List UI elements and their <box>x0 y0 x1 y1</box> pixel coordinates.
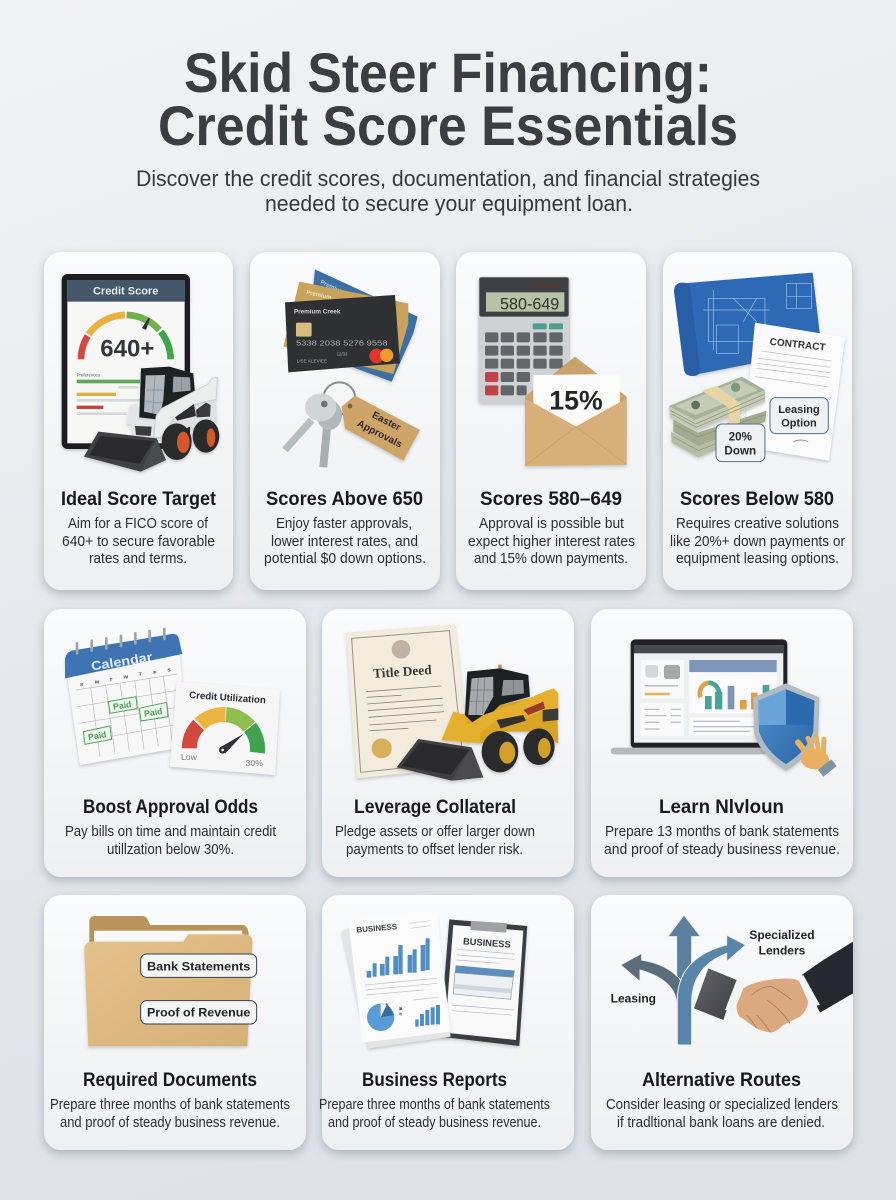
heading: Alternative Routes <box>642 1070 801 1091</box>
icon: title deed and yellow skid steer <box>346 624 558 781</box>
panel: scores above 650 <box>250 252 440 590</box>
panel: ideal score target <box>44 252 233 590</box>
body text: and proof of steady business revenue. <box>604 841 840 858</box>
body text: and proof of steady business revenue. <box>328 1114 541 1131</box>
icon: blueprint, contract and cash: 20% <box>729 430 753 443</box>
body text <box>468 515 635 567</box>
icon: credit score tablet and skid steer: Credit Score <box>93 286 158 298</box>
icon: folder with tabs: Proof of Revenue <box>147 1006 251 1019</box>
body text <box>50 1096 290 1131</box>
panel: boost approval odds <box>44 609 306 877</box>
heading: Scores Above 650 <box>266 489 423 510</box>
icon: credit cards and keys <box>283 269 420 467</box>
body text <box>670 515 845 567</box>
heading: Scores Below 580 <box>680 489 834 510</box>
heading: Boost Approval Odds <box>83 797 258 818</box>
heading: Scores 580–649 <box>480 489 622 510</box>
subtitle: Discover the credit scores, documentation, and financial strategies <box>136 166 760 191</box>
icon: laptop and shield <box>611 639 834 773</box>
body text: if tradltional bank loans are denied. <box>617 1114 825 1131</box>
body text <box>264 515 426 567</box>
body text: utillzation below 30%. <box>107 841 234 858</box>
body text <box>606 1096 838 1131</box>
icon: credit cards and keys: Premium <box>319 280 345 296</box>
body text: Prepare three months of bank statements <box>319 1096 550 1113</box>
icon: calendar and utilization gauge: Low <box>181 752 198 762</box>
icon: calendar and utilization gauge <box>65 629 280 775</box>
icon: report and clipboard <box>342 911 527 1048</box>
body text <box>319 1096 550 1131</box>
icon: calendar and utilization gauge: S <box>80 682 84 688</box>
subtitle <box>136 166 760 216</box>
icon: calendar and utilization gauge: Credit Utilization <box>189 690 266 706</box>
title: Credit Score Essentials <box>158 94 738 157</box>
body text: Consider leasing or specialized lenders <box>606 1096 838 1113</box>
icon: credit score tablet and skid steer <box>62 274 219 472</box>
icon: forked arrows and handshake: Specialized <box>749 928 815 942</box>
panel: scores below 580 <box>663 252 852 590</box>
heading: Learn Nlvloun <box>659 797 784 818</box>
body text: Approval is possible but <box>479 515 625 532</box>
body text: Pledge assets or offer larger down <box>335 823 535 840</box>
body text: 640+ to secure favorable <box>62 533 215 550</box>
icon: calendar and utilization gauge: Paid <box>87 729 107 742</box>
icon: credit cards and keys: Approvals <box>355 418 404 451</box>
panel: learn nivloun <box>591 609 853 877</box>
body text: like 20%+ down payments or <box>670 533 845 550</box>
heading: Business Reports <box>362 1070 507 1091</box>
icon: calendar and utilization gauge: Paid <box>143 706 163 719</box>
body text: rates and terms. <box>89 550 187 567</box>
icon: credit score tablet and skid steer: Preferences <box>77 373 100 378</box>
icon: blueprint, contract and cash: Leasing <box>778 404 820 416</box>
body text: Pay bills on time and maintain credit <box>65 823 277 840</box>
icon: calendar and utilization gauge: 30% <box>246 758 263 768</box>
panel: business reports <box>319 895 574 1150</box>
body text: payments to offset lender risk. <box>346 841 523 858</box>
panel: leverage collateral <box>322 609 574 877</box>
body text: Enjoy faster approvals, <box>276 515 412 532</box>
body text <box>335 823 535 858</box>
icon: report and clipboard: BUSINESS <box>356 922 398 935</box>
icon: calendar and utilization gauge: M <box>95 679 99 685</box>
heading: Required Documents <box>83 1070 257 1091</box>
icon: forked arrows and handshake: Lenders <box>759 944 806 958</box>
icon: calendar and utilization gauge: W <box>123 674 128 680</box>
icon: folder with tabs <box>84 916 257 1046</box>
icon: credit cards and keys: 12/33 <box>337 351 348 356</box>
icon: credit cards and keys: Easter <box>370 410 402 434</box>
body text: and proof of steady business revenue. <box>60 1114 280 1131</box>
body text: Prepare 13 months of bank statements <box>605 823 839 840</box>
panel: alternative routes <box>591 895 853 1150</box>
icon: calendar and utilization gauge: T <box>109 677 112 683</box>
icon: report and clipboard: BUSINESS <box>463 936 511 950</box>
body text: equipment leasing options. <box>676 550 839 567</box>
panel: scores 580-649 <box>456 252 646 590</box>
body text: expect higher interest rates <box>468 533 635 550</box>
title: Skid Steer Financing: <box>184 41 712 104</box>
body text <box>65 823 277 858</box>
body text: Requires creative solutions <box>676 515 839 532</box>
icon: calendar and utilization gauge: T <box>139 672 142 678</box>
icon: credit cards and keys: LISE ALEVIEE <box>297 359 327 364</box>
body text: and 15% down payments. <box>474 550 628 567</box>
icon: blueprint, contract and cash: Down <box>724 445 756 458</box>
body text <box>62 515 215 567</box>
icon: credit cards and keys: Premium Creek <box>294 308 341 315</box>
icon: calculator and envelope: 15% <box>549 385 603 415</box>
heading: Ideal Score Target <box>61 489 217 510</box>
title <box>158 41 738 157</box>
body text: lower interest rates, and <box>271 533 418 550</box>
icon: credit score tablet and skid steer: 640+ <box>100 336 154 363</box>
icon: calculator and envelope: 580-649 <box>500 294 559 313</box>
icon: calendar and utilization gauge: Paid <box>112 699 132 712</box>
icon: calendar and utilization gauge: F <box>153 670 156 676</box>
icon: forked arrows and handshake <box>611 915 853 1045</box>
icon: credit cards and keys: 5338 2038 5276 9558 <box>296 340 388 347</box>
body text: potential $0 down options. <box>264 550 426 567</box>
icon: forked arrows and handshake: Leasing <box>611 992 656 1006</box>
icon: folder with tabs: Bank Statements <box>147 960 250 973</box>
subtitle: needed to secure your equipment loan. <box>265 191 633 216</box>
icon: title deed and yellow skid steer: Title Deed <box>373 662 433 681</box>
panel: required documents <box>44 895 306 1150</box>
body text: Aim for a FICO score of <box>68 515 209 532</box>
icon: calendar and utilization gauge: Calendar <box>90 650 153 673</box>
heading: Leverage Collateral <box>354 797 516 818</box>
body text: Prepare three months of bank statements <box>50 1096 290 1113</box>
body text <box>604 823 840 858</box>
icon: credit cards and keys: Premium <box>306 290 332 301</box>
icon: calculator and envelope <box>478 277 627 466</box>
icon: blueprint, contract and cash: Option <box>781 418 817 430</box>
icon: blueprint, contract and cash: CONTRACT <box>769 337 826 354</box>
icon: calendar and utilization gauge: S <box>167 668 171 674</box>
icon: blueprint, contract and cash <box>669 273 845 462</box>
